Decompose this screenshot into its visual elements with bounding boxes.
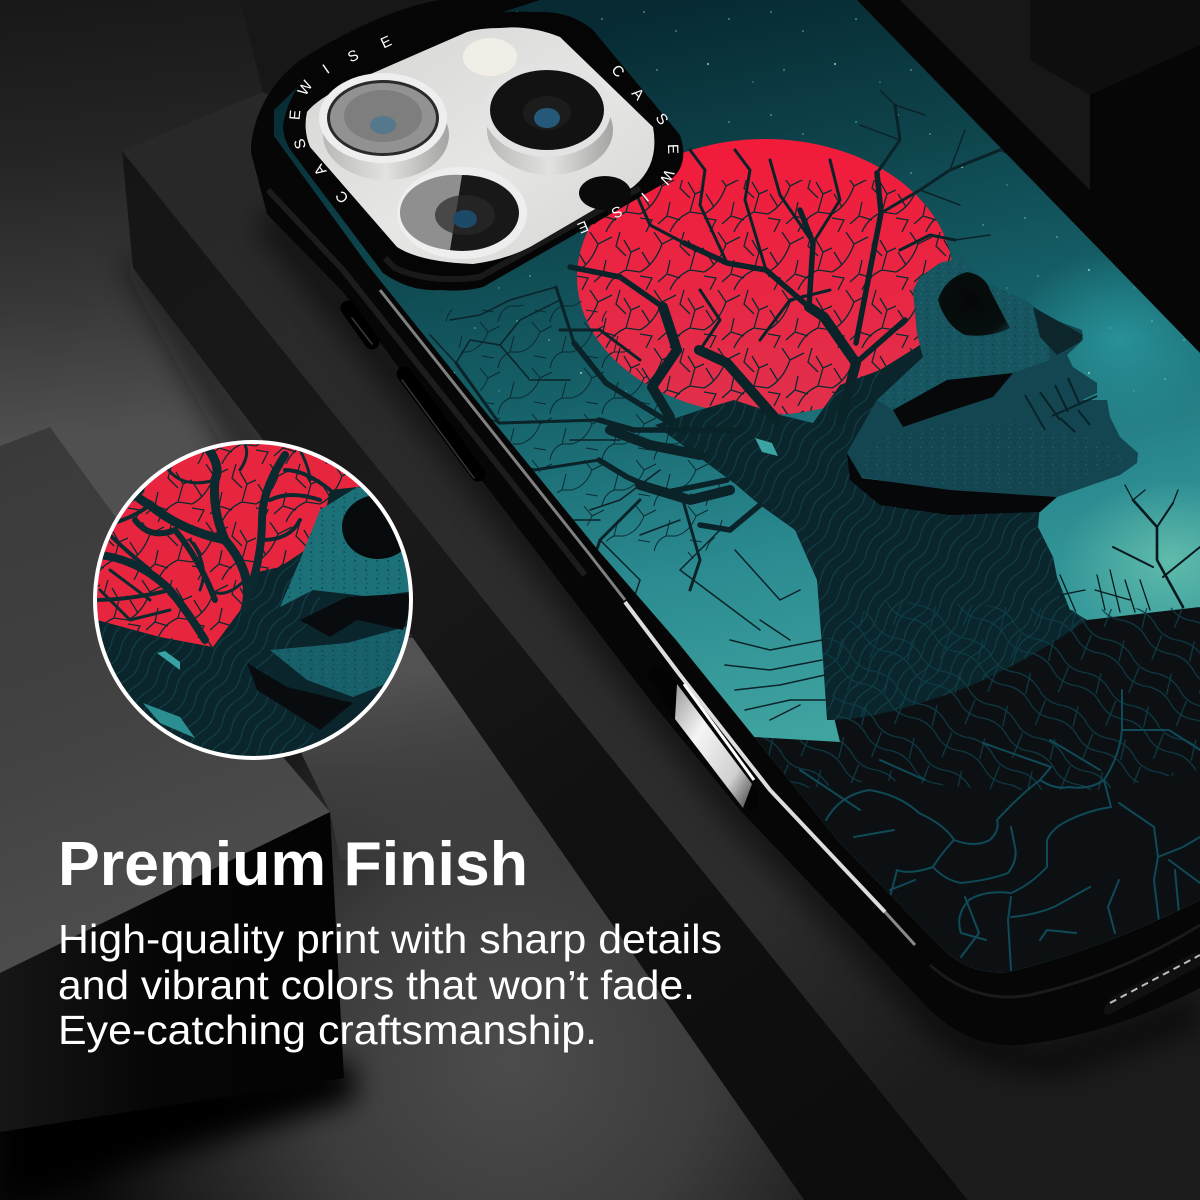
artwork cloud glow	[1040, 266, 1200, 402]
heading: Premium Finish	[58, 830, 528, 899]
inset eye socket	[342, 496, 402, 559]
brand ring text left: W	[294, 77, 317, 99]
inset lower teal patch	[143, 703, 195, 738]
flash	[463, 38, 517, 76]
artwork skull	[847, 258, 1138, 515]
side switch and volume buttons	[348, 308, 478, 478]
inset jaw	[270, 626, 407, 697]
inset shadow gaps	[247, 593, 415, 730]
brand ring text right: W	[655, 167, 677, 188]
upper backdrop	[240, 0, 1200, 400]
brand ring text right: C	[608, 62, 628, 81]
brand ring text left: E	[378, 33, 394, 52]
case artwork	[260, 0, 1200, 1000]
phone case gloss edge	[268, 190, 1200, 997]
artwork trunk fibers	[655, 370, 1087, 720]
skull under jaw shadow	[847, 453, 1057, 515]
brand ring text right	[575, 62, 681, 236]
skull eye socket	[938, 272, 1010, 336]
skull teeth	[1025, 378, 1097, 432]
brand ring text left: I	[320, 61, 333, 78]
frame lower sheen	[385, 188, 640, 279]
lower left block top face	[0, 427, 330, 973]
inset branches	[95, 445, 330, 640]
camera window glass	[306, 27, 654, 264]
brand ring text right: S	[652, 110, 671, 128]
camera bump frame	[283, 12, 683, 291]
inset lit skull	[280, 487, 420, 607]
body copy: Eye-catching craftsmanship.	[58, 1007, 597, 1053]
skull cheek hole	[893, 373, 1013, 427]
lens two	[483, 63, 613, 175]
inset white ring	[95, 442, 411, 758]
artwork red moon	[577, 139, 953, 415]
phone cast shadow	[267, 214, 1200, 1060]
body copy: High-quality print with sharp details	[58, 916, 722, 962]
brand ring text right: E	[664, 144, 681, 154]
body copy	[58, 916, 722, 1053]
microphone hole	[579, 176, 631, 210]
skull nose cavity	[1033, 307, 1083, 355]
floor wedge	[0, 560, 804, 1200]
floor upper highlight	[290, 620, 570, 860]
artwork moon twig texture	[570, 180, 960, 420]
phone case body	[251, 0, 1200, 1045]
artwork tree canopy and neck mass	[655, 345, 1087, 720]
artwork stars	[347, 11, 1185, 392]
artwork ground root web	[754, 600, 1200, 790]
brand ring text left: S	[345, 47, 361, 66]
artwork small right tree	[1060, 485, 1200, 612]
inset zoom circle	[90, 440, 420, 770]
lower left block front face	[0, 812, 344, 1132]
artwork sky	[260, 0, 1200, 1000]
inset diamond	[157, 651, 180, 670]
brand ring text right: E	[575, 217, 591, 236]
platform front face	[122, 151, 968, 1200]
brand ring text left: S	[291, 137, 310, 151]
inset dark tree mass	[98, 486, 409, 756]
silver side button	[646, 665, 758, 812]
brand ring text right: A	[628, 85, 647, 104]
bottom port	[1104, 953, 1200, 1015]
inset twig texture	[98, 444, 346, 647]
artwork dark lower ground	[754, 600, 1200, 1000]
artwork small diamond	[755, 438, 778, 456]
brand ring text right: I	[638, 189, 652, 204]
brand ring text left: E	[287, 109, 304, 121]
artwork left canopy twigs	[440, 300, 740, 560]
brand ring text left	[287, 33, 394, 206]
artwork roots	[800, 690, 1200, 970]
artwork horizon glow	[1080, 493, 1200, 615]
brand ring text left: A	[311, 161, 330, 179]
body copy: and vibrant colors that won’t fade.	[58, 962, 695, 1008]
upper right block	[1030, 0, 1200, 370]
wall shadow next to platform	[120, 260, 420, 640]
brand ring text right: S	[609, 202, 625, 221]
artwork main branches	[430, 90, 1060, 720]
inset trunk fibers	[102, 553, 320, 756]
lens one	[319, 73, 449, 180]
lower block cast shadow	[0, 1060, 356, 1200]
lens three	[397, 167, 527, 259]
brand ring text left: C	[332, 187, 352, 206]
